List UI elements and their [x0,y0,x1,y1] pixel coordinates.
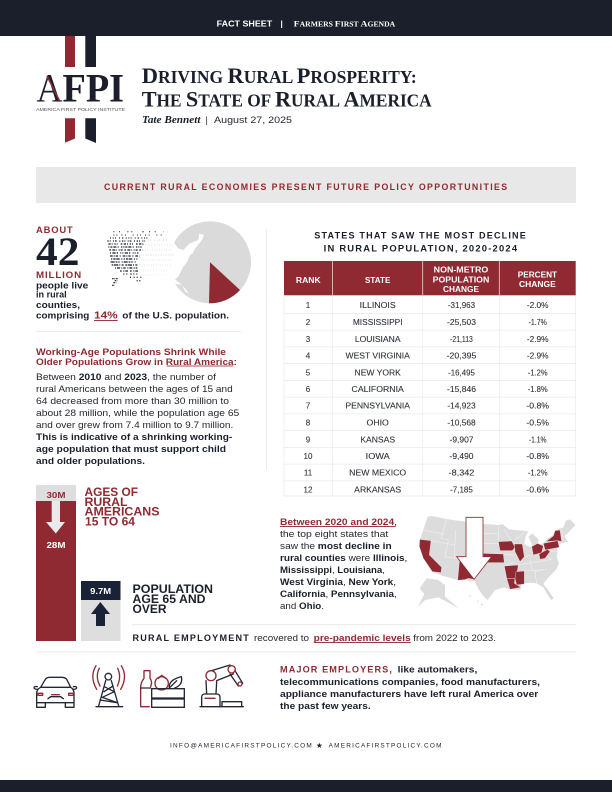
table rows: 10 [304,452,313,461]
chart: ages 15 to 64 bar: 30M [46,491,66,500]
table rows: 9 [306,435,311,444]
table rows: 6 [306,385,311,394]
panel: working-age populations text [36,347,239,466]
byline [142,115,292,126]
table rows: NEW YORK [355,368,402,377]
label: ages of rural Americans: AMERICANS [84,505,160,519]
table rows: 7 [306,402,311,411]
table rows: -2.9% [527,352,549,361]
body paragraph: This is indicative of a shrinking working- [36,432,232,442]
text block: top eight states: West Virginia , New York , [280,577,396,587]
table rows [304,301,549,495]
logo: America First Policy Institute: FPI [62,66,124,111]
rural population pie and map [100,221,251,303]
heading: working-age populations: Older Populations Grow in Rural America: [36,357,237,367]
table header: PERCENT [518,271,557,280]
text: major employers: the past few years. [280,701,371,711]
table rows: -0.6% [526,486,549,495]
top header bar: FACT SHEET [217,20,272,29]
text: major employers: appliance manufacturers have left rural America over [280,689,539,699]
footer contact line [170,741,443,750]
table header: NON-METRO [434,266,488,275]
footer contact line: INFO@AMERICAFIRSTPOLICY.COM [170,742,313,750]
table rows: 1 [306,301,311,310]
table rows: 2 [306,318,311,327]
title: DRIVING RURAL PROSPERITY: [142,63,417,88]
table rows: -2.0% [527,301,549,310]
table rows: 3 [306,335,311,344]
table rows: -0.5% [526,419,549,428]
table rows: -21,113 [450,335,473,344]
text: rural employment: from 2022 to 2023. [413,633,496,643]
title [142,63,432,112]
text: rural employment: pre-pandemic levels [314,633,411,643]
table rows: 11 [304,469,313,478]
banner [36,167,576,203]
table rows: -20,395 [447,352,477,361]
footer contact line: AMERICAFIRSTPOLICY.COM [329,742,443,750]
label: population age 65 and over [132,582,213,616]
table rows: -31,963 [448,301,476,310]
heading: working-age populations: Working-Age Populations Shrink While [36,347,226,357]
text block: top eight states: California , Pennsylvania , [280,589,397,599]
text block: top eight states: Between 2020 and 2024 , [280,517,397,527]
42 million text: in rural [36,290,67,300]
label: ages of rural Americans [84,485,160,528]
table rows: NEW MEXICO [349,469,406,478]
chart: age 65 and over bar [81,581,120,641]
42 million text: 42 [36,229,80,274]
table header: CHANGE [519,280,556,289]
42 million text [36,225,229,322]
text block: top eight states [280,517,407,611]
footer contact line: ★ [316,741,323,750]
table rows: -0.8% [526,452,549,461]
table rows: OHIO [367,419,389,428]
table rows: 4 [306,352,311,361]
logo: America First Policy Institute: AMERICA FIRST POLICY INSTITUTE [36,107,125,112]
byline: August 27, 2025 [214,115,292,125]
text: rural employment: RURAL EMPLOYMENT [132,633,250,643]
text: major employers: MAJOR EMPLOYERS, [280,664,393,674]
top header bar: | [280,20,283,29]
table rows: -1.7% [529,318,547,327]
body paragraph: age population that must support child [36,444,226,454]
table rows: -8,342 [449,469,475,478]
table header: CHANGE [443,285,480,294]
chart: age 65 and over bar: 9.7M [90,587,112,596]
table rows: -16,495 [448,368,475,377]
table rows: WEST VIRGINIA [346,352,411,361]
table rows: -9,490 [450,452,474,461]
42 million text: counties, [36,300,80,310]
table rows: -0.8% [526,402,549,411]
top header bar [0,0,612,36]
table header: STATE [365,276,391,285]
table rows: CALIFORNIA [352,385,405,394]
text block: top eight states: rural counties were Illinois, [280,553,407,563]
table rows: ARKANSAS [354,486,401,495]
42 million text: 14% [94,310,118,322]
text block: top eight states: saw the most decline in [280,541,392,551]
table rows: -1.2% [528,469,548,478]
bottom bar [0,780,612,792]
table title [314,230,527,253]
text: rural employment: recovered to [254,633,309,643]
table rows: -14,923 [447,402,476,411]
table rows: IOWA [366,452,390,461]
table rows: KANSAS [360,435,395,444]
table rows: -15,846 [447,385,477,394]
heading: working-age populations [36,347,237,367]
text block: top eight states: Mississippi, Louisiana, [280,565,385,575]
42 million text: people live [36,280,88,290]
text block: top eight states: and Ohio. [280,601,324,611]
chart: ages 15 to 64 bar: 28M [46,541,66,550]
table title: STATES THAT SAW THE MOST DECLINE [314,230,527,240]
icon: car [34,677,77,707]
label: population age 65 and over: POPULATION [132,582,213,596]
body paragraph: 64 decreased from more than 30 million to [36,396,229,406]
banner: CURRENT RURAL ECONOMIES PRESENT FUTURE POLICY OPPORTUNITIES [104,182,508,192]
text: rural employment [132,633,496,643]
table rows: -1.8% [528,385,548,394]
label: ages of rural Americans: AGES OF [84,485,138,499]
label: ages of rural Americans: 15 TO 64 [85,514,135,528]
table rows: -1.2% [528,368,548,377]
map: states with most decline [418,516,576,608]
text: major employers: like automakers, [398,664,477,674]
icon: robotic arm [200,665,243,707]
body paragraph: and over grew from 7.4 million to 9.7 million. [36,420,233,430]
top header bar: FARMERS FIRST AGENDA [294,19,395,29]
arrow: decline [457,517,492,579]
chart: ages 15 to 64 bar [36,485,76,641]
table rows: ILLINOIS [360,301,396,310]
42 million text: ABOUT [36,225,74,235]
42 million text: comprising [36,310,90,320]
label: population age 65 and over: AGE 65 AND [132,592,206,606]
title: THE STATE OF RURAL AMERICA [142,86,432,112]
42 million text: MILLION [36,270,82,280]
table rows: -7,185 [450,486,473,495]
text block: top eight states: the top eight states that [280,529,389,539]
label: population age 65 and over: OVER [132,602,167,616]
body paragraph: and older populations. [36,456,145,466]
icon: food crate [141,671,184,707]
icons: major employers [34,665,243,707]
table rows: PENNSYLVANIA [345,402,411,411]
byline: Tate Bennett [142,115,202,126]
table header: RANK [296,276,321,285]
body paragraph [36,372,239,466]
42 million text: of the U.S. population. [122,310,229,320]
logo: America First Policy Institute: A [36,66,63,111]
table rows: LOUISIANA [355,335,401,344]
table rows: -2.9% [527,335,549,344]
byline: | [206,115,208,125]
body paragraph: rural Americans between the ages of 15 and [36,384,233,394]
table rows: 5 [306,368,311,377]
table header: POPULATION [433,276,490,284]
label: ages of rural Americans: RURAL [84,495,128,509]
table rows: 8 [306,419,311,428]
table rows: -9,907 [450,435,474,444]
table rows: 12 [304,486,313,495]
body paragraph: about 28 million, while the population age 65 [36,408,239,418]
text: major employers: telecommunications companies, food manufacturers, [280,677,540,687]
body paragraph: Between 2010 and 2023, the number of [36,372,216,382]
table rows: -1.1% [529,435,547,444]
icon: telecom tower [93,666,125,707]
logo: America First Policy Institute [36,36,125,143]
table rows: -10,568 [447,419,476,428]
table header [284,261,576,295]
table rows: -25,503 [447,318,477,327]
table rows: MISSISSIPPI [353,318,403,327]
table: states with most rural decline [284,261,576,496]
panel: 42 million statistic [36,221,251,322]
text: major employers [280,664,540,711]
table title: IN RURAL POPULATION, 2020-2024 [324,243,518,253]
